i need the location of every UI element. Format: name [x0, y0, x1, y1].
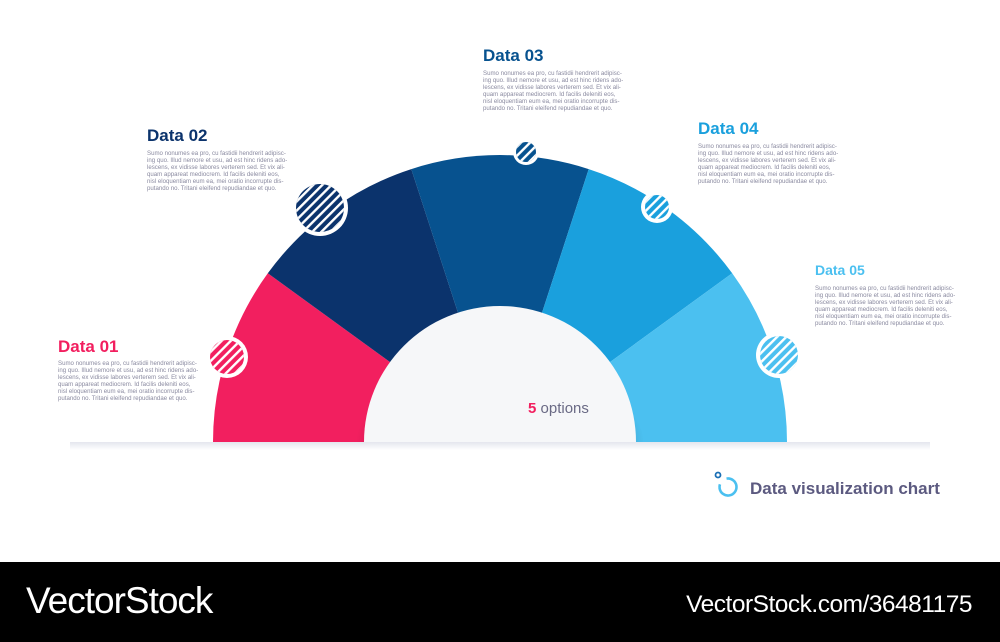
text block: Data 01: putando no. Tritani eleifend repudiandae et quo. [58, 395, 188, 402]
text block: Data 04 [698, 119, 838, 185]
text block: Data 02: quam appareat mediocrem. Id facilis deleniti eos, [147, 171, 280, 178]
text block: Data 05: Data 05 [815, 262, 865, 278]
icon: chart ring [716, 472, 738, 497]
text block: Data 03: Sumo nonumes ea pro, cu fastidii hendrerit adipisc- [483, 70, 622, 77]
text block: Data 02: lescens, ex vidisse labores verterem sed. Et vix ali- [147, 164, 285, 171]
text block: Data 05: putando no. Tritani eleifend repudiandae et quo. [815, 320, 945, 327]
text block: Data 04: quam appareat mediocrem. Id facilis deleniti eos, [698, 164, 831, 171]
marker: Data 03 [513, 139, 539, 165]
label: 5 options: 5 options [528, 400, 589, 417]
text block: Data 01: Sumo nonumes ea pro, cu fastidii hendrerit adipisc- [58, 360, 197, 367]
text block: Data 05 [815, 262, 955, 327]
text block: Data 01: ing quo. Illud nemore et usu, ad est hinc ridens ado- [58, 367, 198, 374]
segment: Data 05 [500, 273, 787, 442]
text block: Data 04: putando no. Tritani eleifend repudiandae et quo. [698, 178, 828, 185]
text block: Data 03: nisl eloquentiam eum ea, mei oratio incorrupte dis- [483, 98, 620, 105]
text block: Data 03: lescens, ex vidisse labores verterem sed. Et vix ali- [483, 84, 621, 91]
segment: Data 02 [268, 169, 500, 442]
text block: Data 04: lescens, ex vidisse labores verterem sed. Et vix ali- [698, 157, 836, 164]
footer title: Data visualization chart [750, 479, 940, 498]
text block: Data 02: ing quo. Illud nemore et usu, ad est hinc ridens ado- [147, 157, 287, 164]
text block: Data 03: ing quo. Illud nemore et usu, ad est hinc ridens ado- [483, 77, 623, 84]
marker: Data 01 [206, 336, 248, 378]
text block: Data 02 [147, 126, 287, 192]
inner white semicircle [364, 306, 636, 442]
watermark bar: VectorStock [26, 580, 214, 621]
text block: Data 04: ing quo. Illud nemore et usu, ad est hinc ridens ado- [698, 150, 838, 157]
text block: Data 02: nisl eloquentiam eum ea, mei oratio incorrupte dis- [147, 178, 284, 185]
marker: Data 04 [641, 191, 673, 223]
text block: Data 03: Data 03 [483, 46, 543, 65]
text block: Data 01: lescens, ex vidisse labores verterem sed. Et vix ali- [58, 374, 196, 381]
floor shadow [70, 442, 930, 450]
marker: Data 05 [756, 332, 802, 378]
marker: Data 02 [292, 180, 348, 236]
inner shadow [356, 298, 644, 442]
segment: Data 01 [213, 273, 500, 442]
text block: Data 01: quam appareat mediocrem. Id facilis deleniti eos, [58, 381, 191, 388]
text block: Data 05: Sumo nonumes ea pro, cu fastidii hendrerit adipisc- [815, 285, 954, 292]
text block: Data 02: Data 02 [147, 126, 207, 145]
text block: Data 05: ing quo. Illud nemore et usu, ad est hinc ridens ado- [815, 292, 955, 299]
text block: Data 03 [483, 46, 623, 112]
text block: Data 05: nisl eloquentiam eum ea, mei oratio incorrupte dis- [815, 313, 952, 320]
text block: Data 03: quam appareat mediocrem. Id facilis deleniti eos, [483, 91, 616, 98]
text block: Data 02: Sumo nonumes ea pro, cu fastidii hendrerit adipisc- [147, 150, 286, 157]
text block: Data 05: lescens, ex vidisse labores verterem sed. Et vix ali- [815, 299, 953, 306]
text block: Data 01: Data 01 [58, 337, 118, 356]
segment: Data 03 [411, 155, 589, 442]
segment: Data 04 [500, 169, 732, 442]
text block: Data 05: quam appareat mediocrem. Id facilis deleniti eos, [815, 306, 948, 313]
text block: Data 04: Sumo nonumes ea pro, cu fastidii hendrerit adipisc- [698, 143, 837, 150]
watermark bar [0, 562, 1000, 642]
text block: Data 01: nisl eloquentiam eum ea, mei oratio incorrupte dis- [58, 388, 194, 395]
chart: semicircle [213, 155, 787, 442]
watermark bar: VectorStock.com/36481175 [686, 591, 972, 618]
text block: Data 03: putando no. Tritani eleifend repudiandae et quo. [483, 105, 613, 112]
text block: Data 01 [58, 337, 198, 402]
text block: Data 04: nisl eloquentiam eum ea, mei oratio incorrupte dis- [698, 171, 834, 178]
text block: Data 04: Data 04 [698, 119, 759, 138]
text block: Data 02: putando no. Tritani eleifend repudiandae et quo. [147, 185, 277, 192]
